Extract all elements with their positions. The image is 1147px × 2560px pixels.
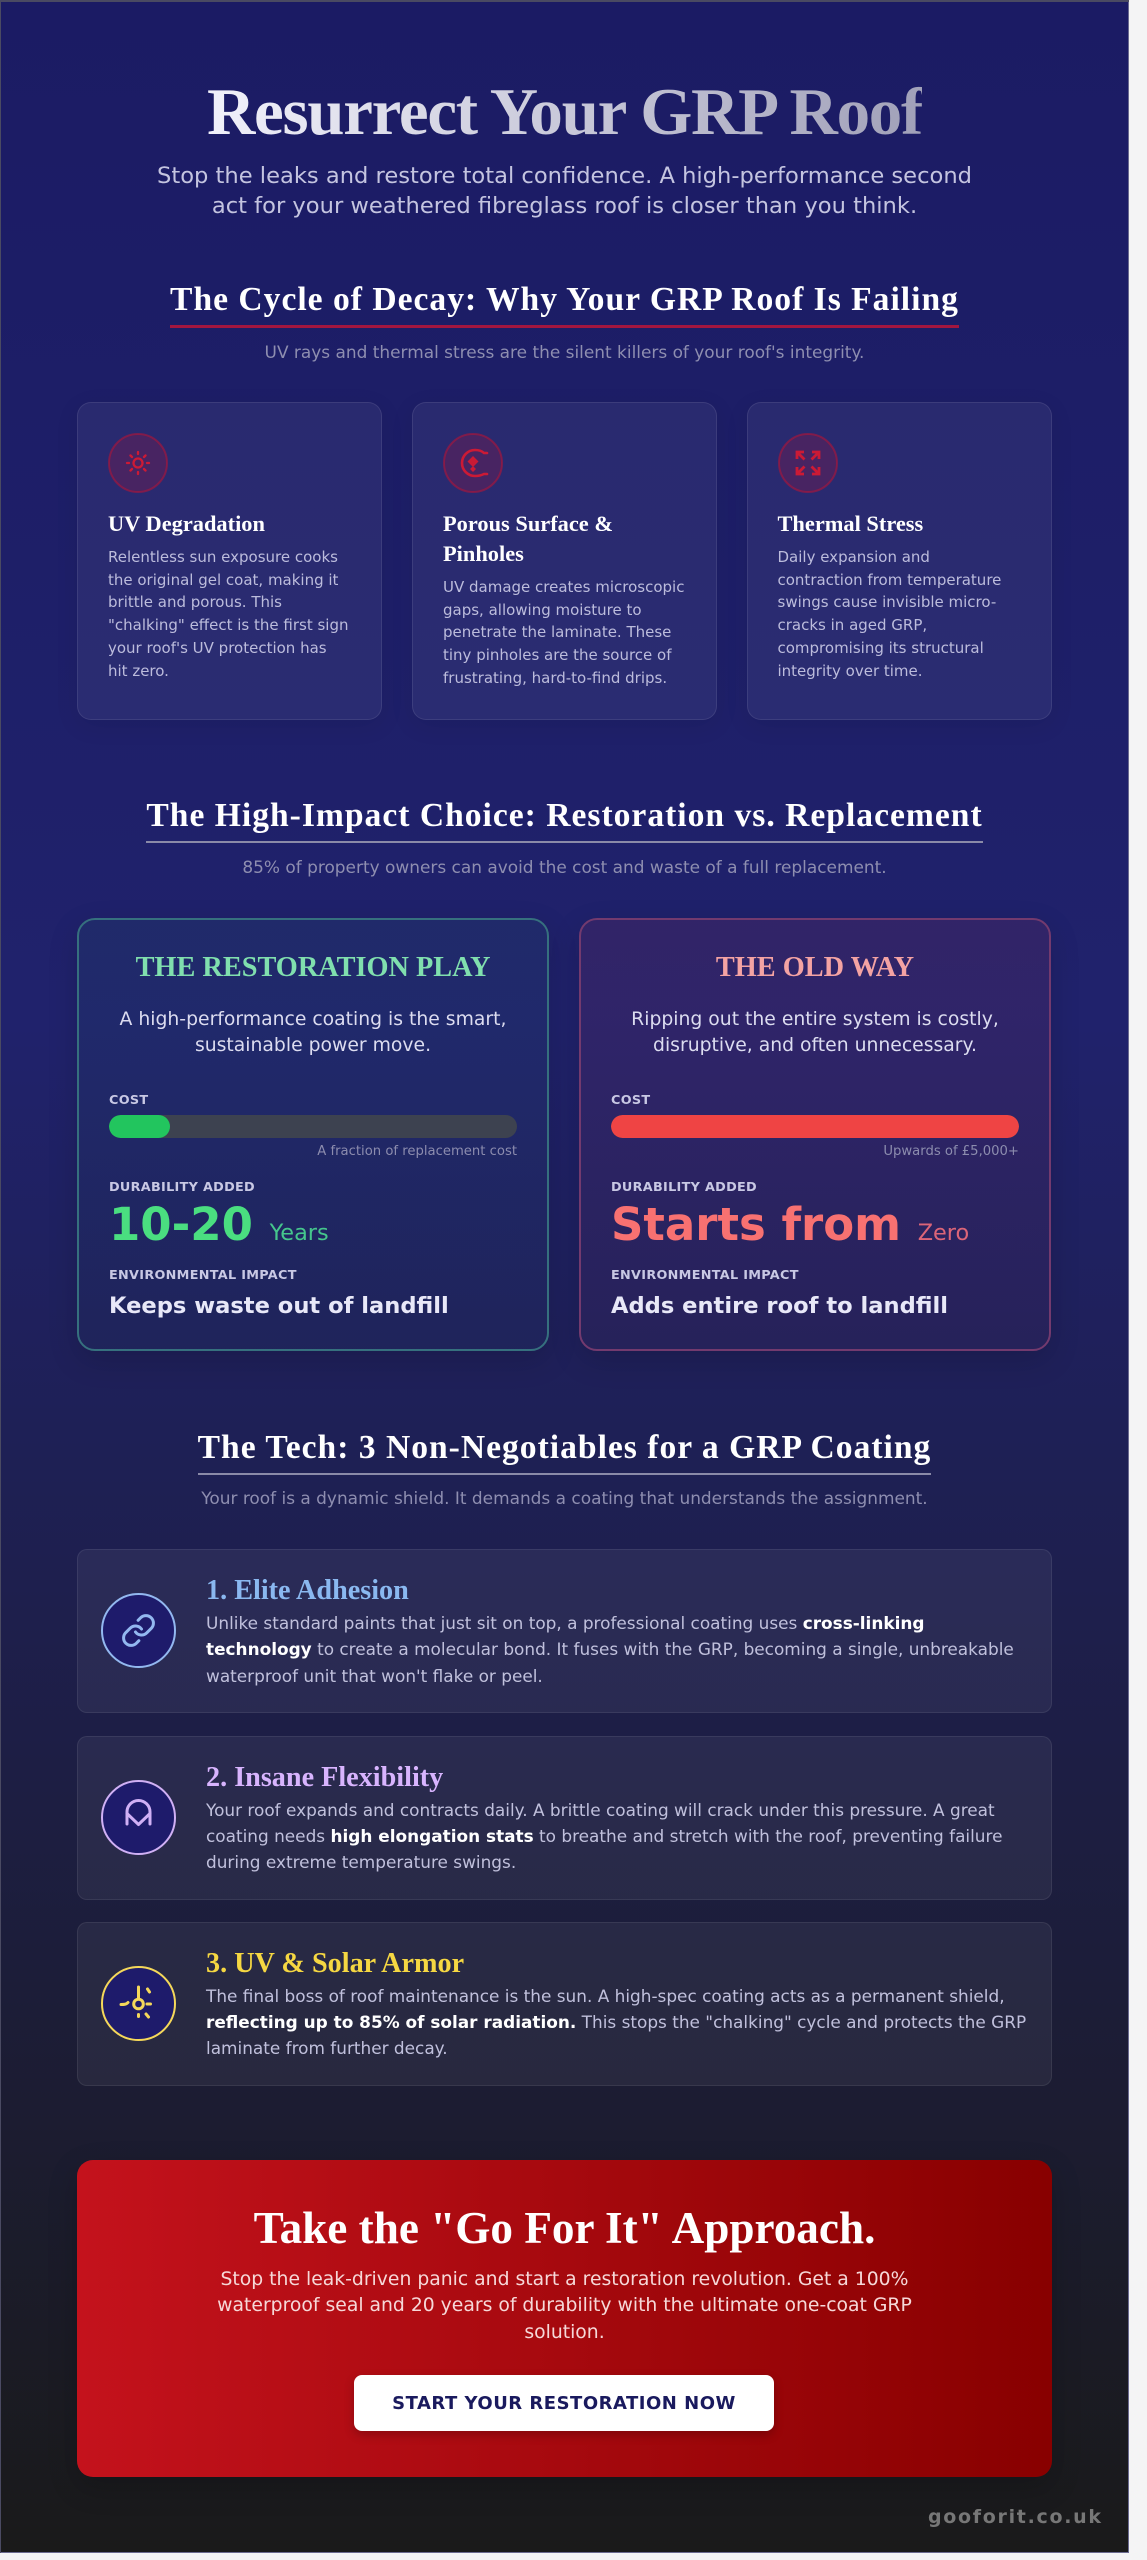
card body xyxy=(443,578,684,687)
card title: Thermal Stress xyxy=(778,511,923,536)
section heading: restoration vs replacement xyxy=(146,797,983,877)
card body: swings cause invisible micro- xyxy=(778,593,996,611)
card title: Porous Surface & xyxy=(443,511,613,536)
card body: compromising its structural xyxy=(778,639,984,657)
panel heading: THE OLD WAY xyxy=(716,952,914,983)
card body: your roof's UV protection has xyxy=(108,639,327,657)
card body: brittle and porous. This xyxy=(108,593,282,611)
icon: sun xyxy=(108,433,168,493)
card body: coating needs high elongation stats to breathe and stretch with the roof, preventing failure xyxy=(206,1826,1002,1846)
section subheading: UV rays and thermal stress are the silent killers of your roof's integrity. xyxy=(265,342,864,362)
panel: the old way xyxy=(579,918,1051,1351)
card body: integrity over time. xyxy=(778,662,923,680)
panel heading: THE RESTORATION PLAY xyxy=(136,952,490,983)
call to action text: Stop the leak-driven panic and start a restoration revolution. Get a 100% xyxy=(221,2268,908,2290)
card body: laminate from further decay. xyxy=(206,2038,448,2058)
card body: Your roof expands and contracts daily. A brittle coating will crack under this pressure. A great xyxy=(206,1800,995,1820)
card body: contraction from temperature xyxy=(778,571,1001,589)
card body: hit zero. xyxy=(108,662,169,680)
panel: insane flexibility xyxy=(77,1736,1052,1900)
stat: durability: Starts from Zero xyxy=(611,1198,969,1251)
card body: frustrating, hard-to-find drips. xyxy=(443,669,667,687)
subtitle xyxy=(157,163,972,219)
card title: 2. Insane Flexibility xyxy=(206,1762,443,1792)
card title: 1. Elite Adhesion xyxy=(206,1575,409,1606)
card body: "chalking" effect is the first sign xyxy=(108,616,348,634)
panel description: A high-performance coating is the smart, xyxy=(120,1008,506,1030)
subtitle: act for your weathered fibreglass roof is closer than you think. xyxy=(212,193,917,219)
heading: The High-Impact Choice: Restoration vs. Replacement xyxy=(146,797,983,834)
card body: technology to create a molecular bond. It fuses with the GRP, becoming a single, unbreakable xyxy=(206,1639,1014,1659)
section heading: cycle of decay xyxy=(170,281,959,362)
panel description: sustainable power move. xyxy=(195,1035,431,1056)
section subheading: Your roof is a dynamic shield. It demands a coating that understands the assignment. xyxy=(201,1488,928,1508)
call to action text xyxy=(217,2268,912,2343)
card body xyxy=(778,548,1001,680)
card body: The final boss of roof maintenance is the sun. A high-spec coating acts as a permanent shield, xyxy=(206,1986,1005,2006)
card body: penetrate the laminate. These xyxy=(443,623,671,641)
stat: environmental impact: Adds entire roof to landfill xyxy=(611,1292,948,1318)
card body: UV damage creates microscopic xyxy=(443,578,684,596)
heading: The Tech: 3 Non-Negotiables for a GRP Coating xyxy=(198,1429,931,1466)
title: Resurrect Your GRP Roof xyxy=(207,74,922,148)
icon: solar xyxy=(101,1966,176,2041)
label: cost: COST xyxy=(109,1093,148,1108)
call to action text: solution. xyxy=(524,2322,605,2343)
card body: cracks in aged GRP, xyxy=(778,616,927,634)
card body: Unlike standard paints that just sit on top, a professional coating uses cross-linking xyxy=(206,1613,925,1633)
label: cost: COST xyxy=(611,1093,650,1108)
caption: cost: A fraction of replacement cost xyxy=(317,1144,517,1159)
panel description xyxy=(120,1008,506,1056)
button: START YOUR RESTORATION NOW xyxy=(392,2393,736,2414)
panel: UV degradation xyxy=(77,402,382,720)
section subheading: 85% of property owners can avoid the cost and waste of a full replacement. xyxy=(242,857,887,877)
card body: reflecting up to 85% of solar radiation. This stops the "chalking" cycle and protects the GRP xyxy=(206,2012,1026,2032)
stat: environmental impact: Keeps waste out of landfill xyxy=(109,1292,449,1318)
call to action text: waterproof seal and 20 years of durability with the ultimate one-coat GRP xyxy=(217,2295,912,2316)
label: environmental impact: ENVIRONMENTAL IMPACT xyxy=(611,1268,799,1282)
section heading: the tech xyxy=(198,1429,931,1508)
card body: Daily expansion and xyxy=(778,548,930,566)
panel description xyxy=(631,1008,999,1056)
card body: during extreme temperature swings. xyxy=(206,1852,516,1872)
card body: tiny pinholes are the source of xyxy=(443,646,672,664)
icon: expanding arrows xyxy=(778,433,838,493)
stat: durability: 10-20 Years xyxy=(109,1198,329,1251)
bar chart: cost xyxy=(611,1115,1019,1138)
label: durability: DURABILITY ADDED xyxy=(611,1180,757,1195)
footer brand: gooforit.co.uk xyxy=(928,2506,1103,2528)
icon: link xyxy=(101,1593,176,1668)
icon: pinhole xyxy=(443,433,503,493)
caption: cost: Upwards of £5,000+ xyxy=(883,1144,1019,1159)
panel: UV and solar armor xyxy=(77,1922,1052,2086)
card body: gaps, allowing moisture to xyxy=(443,601,642,619)
panel: the restoration play xyxy=(77,918,549,1351)
card body: the original gel coat, making it xyxy=(108,571,338,589)
panel description: Ripping out the entire system is costly, xyxy=(631,1008,999,1030)
panel: porous surface xyxy=(412,402,717,720)
button xyxy=(354,2375,774,2431)
call to action heading: Take the "Go For It" Approach. xyxy=(254,2202,875,2252)
card body xyxy=(206,1800,1002,1872)
card body: Relentless sun exposure cooks xyxy=(108,548,338,566)
heading: The Cycle of Decay: Why Your GRP Roof Is Failing xyxy=(170,281,959,318)
card body xyxy=(108,548,348,680)
card title: Pinholes xyxy=(443,541,524,566)
card title: 3. UV & Solar Armor xyxy=(206,1948,464,1978)
label: durability: DURABILITY ADDED xyxy=(109,1180,255,1195)
panel: call to action xyxy=(77,2160,1052,2477)
label: environmental impact: ENVIRONMENTAL IMPACT xyxy=(109,1268,297,1282)
card body xyxy=(206,1613,1014,1686)
panel description: disruptive, and often unnecessary. xyxy=(653,1035,977,1056)
panel: elite adhesion xyxy=(77,1549,1052,1713)
header: title and subtitle xyxy=(157,74,972,219)
panel: thermal stress xyxy=(746,402,1052,720)
subtitle: Stop the leaks and restore total confidence. A high-performance second xyxy=(157,163,972,189)
card body xyxy=(206,1986,1026,2058)
icon: flexible arch xyxy=(101,1780,176,1855)
card title xyxy=(443,511,613,566)
card title: UV Degradation xyxy=(108,511,265,536)
bar chart: cost xyxy=(109,1115,517,1138)
card body: waterproof unit that won't flake or peel. xyxy=(206,1666,543,1686)
